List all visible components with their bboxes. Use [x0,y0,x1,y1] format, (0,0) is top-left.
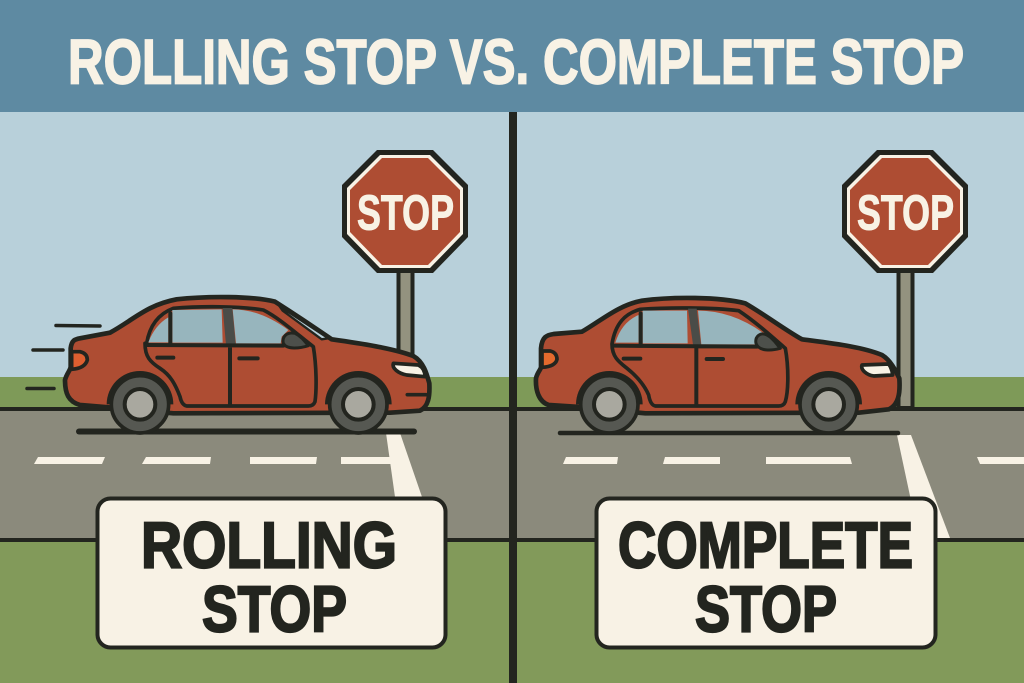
rear wheel [576,371,643,433]
bumper line [407,389,426,400]
title banner [0,0,1024,112]
label: complete stop [596,498,936,648]
label: complete stop: COMPLETE [618,508,913,582]
stop sign [342,150,468,355]
panel: rolling stop [27,150,468,648]
stop line [897,435,950,538]
road dashes [34,457,392,464]
door outline [612,308,788,406]
headlight [862,364,893,376]
windows [615,311,763,344]
mirror [756,334,780,350]
car: complete [536,298,900,433]
label: complete stop: STOP [695,572,837,646]
car body [65,297,429,413]
mirror [283,333,308,348]
rear wheel [107,371,173,433]
tail light [72,352,87,369]
speed lines [27,326,100,388]
label: rolling stop [98,498,446,648]
door pillar [223,308,236,345]
ground shadow line [560,431,898,435]
windshield sliver [279,306,328,339]
front wheel [795,371,862,433]
center divider [509,112,517,683]
label: rolling stop: ROLLING [141,508,397,582]
road dashes [563,457,1024,464]
ground shadow line [79,428,414,434]
tail light [542,351,557,367]
headlight [393,363,425,377]
stop line [386,433,422,497]
door pillar [688,309,701,345]
stop sign: STOP [357,186,454,240]
label: rolling stop: STOP [202,572,347,646]
front wheel [325,371,392,433]
panel: complete stop [536,150,1024,648]
stop sign [842,150,968,408]
door outline [145,307,316,406]
car: rolling [65,297,429,433]
windows [148,309,288,343]
car body [536,298,900,413]
stop sign: STOP [857,186,954,240]
